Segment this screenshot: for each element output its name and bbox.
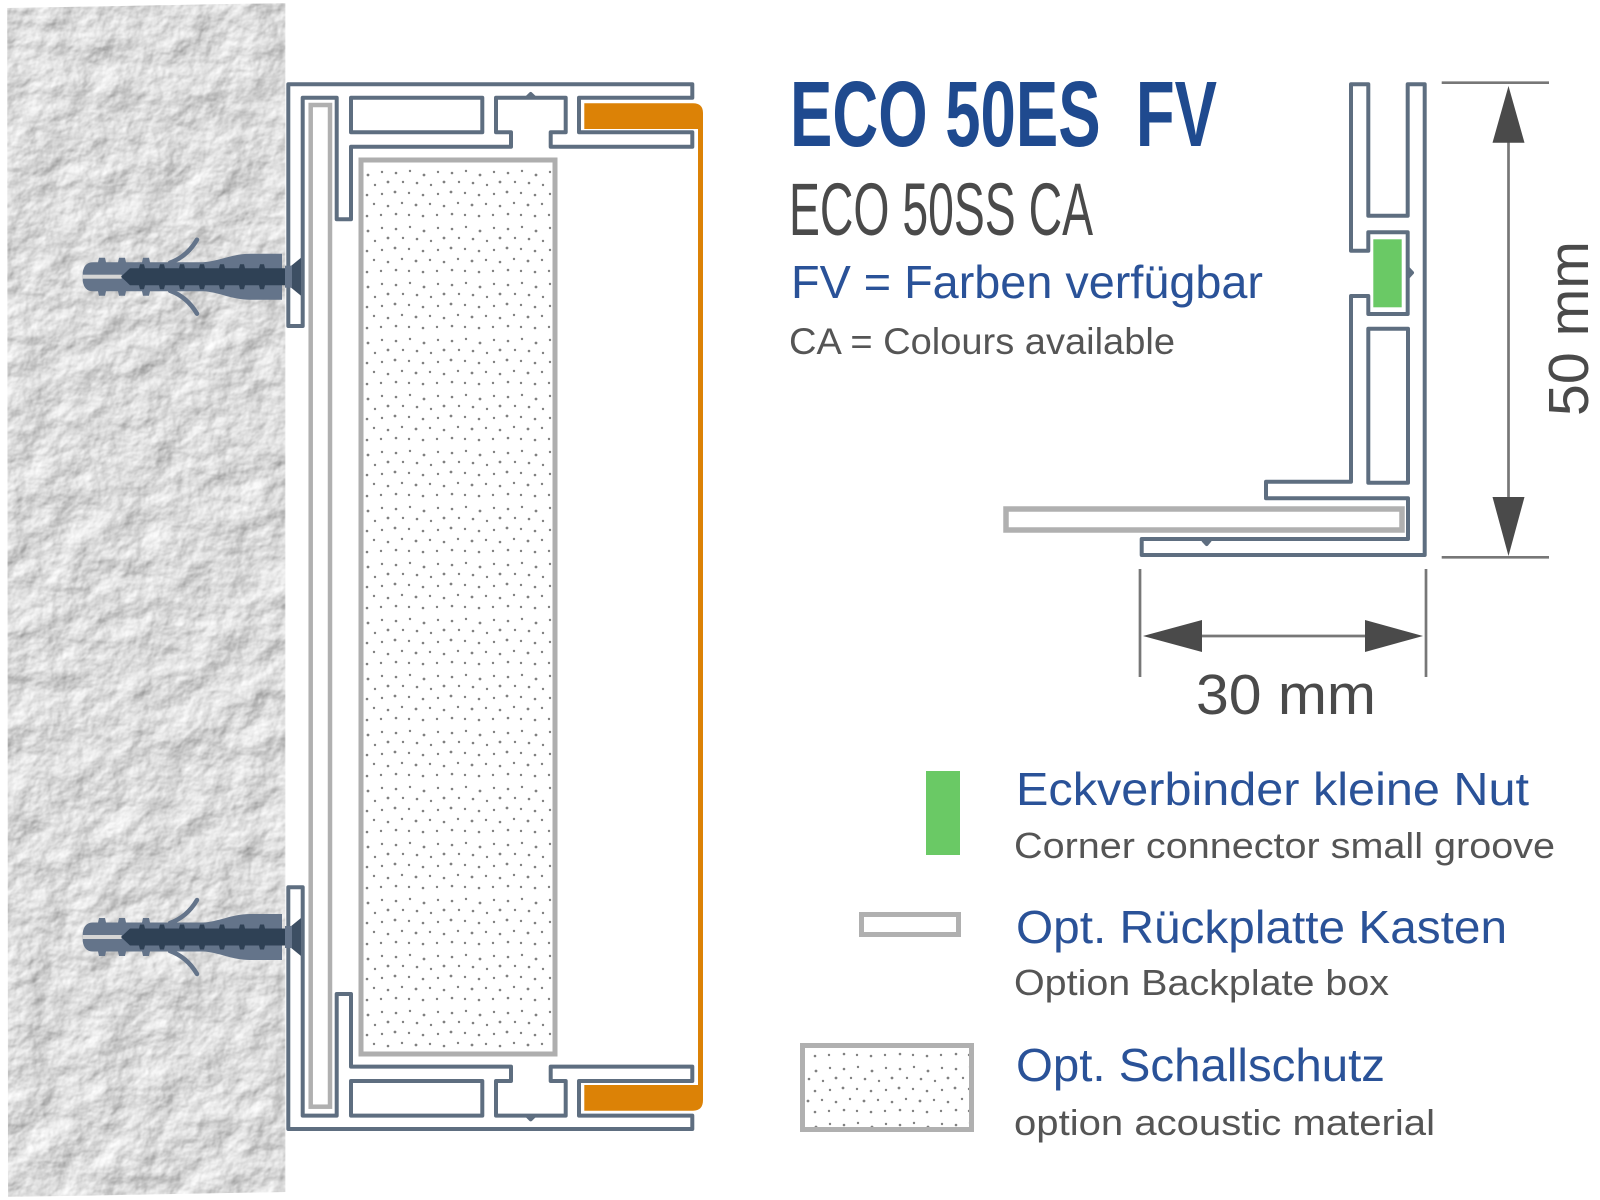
legend label: corner connector [1014,763,1555,866]
corner connector [1373,239,1402,307]
panel: legend [802,763,1555,1143]
legend label: corner connector: Corner connector small groove [1014,825,1555,866]
legend label: acoustic material: Opt. Schallschutz [1016,1039,1385,1091]
panel: profile cross-section [83,84,703,1129]
legend label: backplate: Option Backplate box [1014,962,1389,1003]
upper wall plug and screw [83,240,301,314]
legend label: acoustic material [1014,1039,1435,1143]
width dimension [1140,569,1426,677]
concrete wall [7,3,286,1197]
backplate strip [311,105,330,1107]
legend swatch: backplate [862,914,958,934]
legend label: backplate [1014,901,1507,1003]
height dimension [1442,83,1549,557]
orange colour cover [584,103,703,1111]
legend label: backplate: Opt. Rückplatte Kasten [1016,901,1507,953]
legend label: corner connector: Eckverbinder kleine Nut [1016,763,1529,815]
panel: corner profile with dimensions [1006,83,1600,727]
bottom aluminium profile [288,887,692,1129]
title: ECO 50ES FV [790,62,1217,166]
acoustic material [361,160,555,1054]
lower wall plug and screw [83,900,301,974]
top aluminium profile [288,84,692,326]
backplate [1006,509,1402,530]
legend swatch: corner connector [926,771,960,855]
note: colours English: CA = Colours available [789,321,1175,362]
legend label: acoustic material: option acoustic material [1014,1102,1435,1143]
corner profile outline [1142,84,1425,555]
label: 50 mm: 50 mm [1537,241,1600,416]
legend swatch: acoustic material [802,1046,972,1130]
note: colours German: FV = Farben verfügbar [791,256,1263,308]
label: 30 mm: 30 mm [1196,663,1376,727]
subtitle: ECO 50SS CA [789,168,1093,251]
